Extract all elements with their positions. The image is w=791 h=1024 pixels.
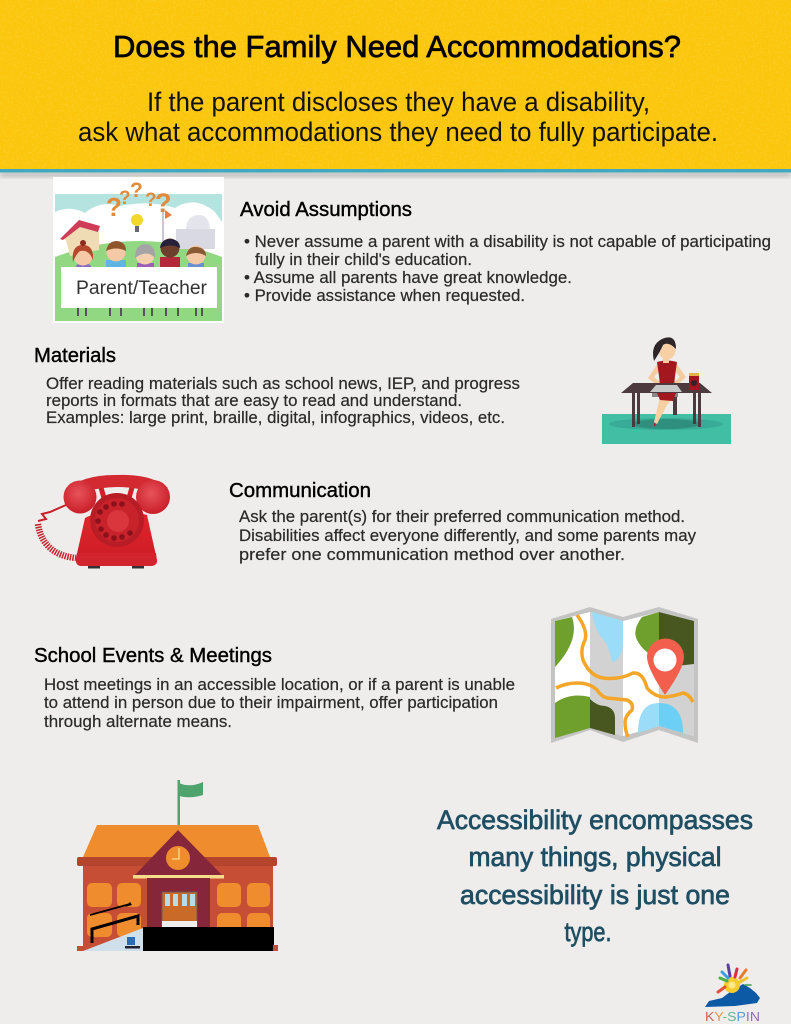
callout: accessibility statement <box>437 805 753 947</box>
callout: accessibility statement: Accessibility encompasses <box>437 805 753 835</box>
body: communication: Ask the parent(s) for their preferred communication method. <box>239 508 685 526</box>
text block: materials <box>34 345 520 427</box>
icon: parent/teacher illustration: ? <box>145 190 157 211</box>
body: school events and meetings <box>44 676 515 731</box>
icon: woman reading at desk <box>602 337 731 444</box>
body: materials: reports in formats that are easy to read and understand. <box>46 392 462 410</box>
heading: materials: Materials <box>34 345 116 367</box>
body: materials: Examples: large print, braille, digital, infographics, videos, etc. <box>46 409 505 427</box>
icon: parent/teacher illustration <box>53 177 224 323</box>
list: avoid assumptions: fully in their child's education. <box>255 251 472 269</box>
icon: parent/teacher illustration: ? <box>155 188 172 218</box>
icon: parent/teacher illustration: ? <box>130 179 143 202</box>
icon: red rotary telephone <box>38 475 170 568</box>
callout: accessibility statement: type. <box>564 917 612 947</box>
body: school events and meetings: through alternate means. <box>44 713 232 731</box>
body: school events and meetings: to attend in person due to their impairment, offer participation <box>44 694 498 712</box>
icon: school building with ramp <box>77 780 278 951</box>
icon: folded map with pin <box>551 607 698 743</box>
list: avoid assumptions: • Never assume a parent with a disability is not capable of participating <box>244 233 771 251</box>
title: Does the Family Need Accommodations? <box>113 29 681 64</box>
list: avoid assumptions: • Assume all parents have great knowledge. <box>244 269 572 287</box>
text block: school events and meetings <box>34 645 515 731</box>
callout: accessibility statement: accessibility is just one <box>460 880 730 910</box>
icon: parent/teacher illustration: Parent/Teacher <box>76 278 208 299</box>
heading: avoid assumptions: Avoid Assumptions <box>240 199 412 221</box>
body: materials <box>46 375 520 427</box>
text block: communication <box>229 480 697 564</box>
subtitle <box>78 87 718 147</box>
subtitle: If the parent discloses they have a disability, <box>147 87 650 117</box>
heading: communication: Communication <box>229 480 371 502</box>
logo: KY-SPIN <box>705 965 760 1024</box>
subtitle: ask what accommodations they need to fully participate. <box>78 117 718 147</box>
logo: KY-SPIN: KY-SPIN <box>705 1009 760 1024</box>
list: avoid assumptions: • Provide assistance when requested. <box>244 287 525 305</box>
panel: header banner <box>0 0 791 177</box>
text block: avoid assumptions <box>240 199 771 305</box>
body: communication: Disabilities affect everyone differently, and some parents may <box>239 527 697 545</box>
list: avoid assumptions <box>244 233 771 305</box>
icon: parent/teacher illustration: ? <box>119 188 131 209</box>
body: materials: Offer reading materials such as school news, IEP, and progress <box>46 375 520 393</box>
body: communication <box>239 508 697 564</box>
body: school events and meetings: Host meetings in an accessible location, or if a parent is unable <box>44 676 515 694</box>
heading: school events and meetings: School Events & Meetings <box>34 645 272 667</box>
body: communication: prefer one communication method over another. <box>239 546 625 564</box>
icon: parent/teacher illustration: ? <box>106 192 122 222</box>
callout: accessibility statement: many things, physical <box>468 842 722 872</box>
